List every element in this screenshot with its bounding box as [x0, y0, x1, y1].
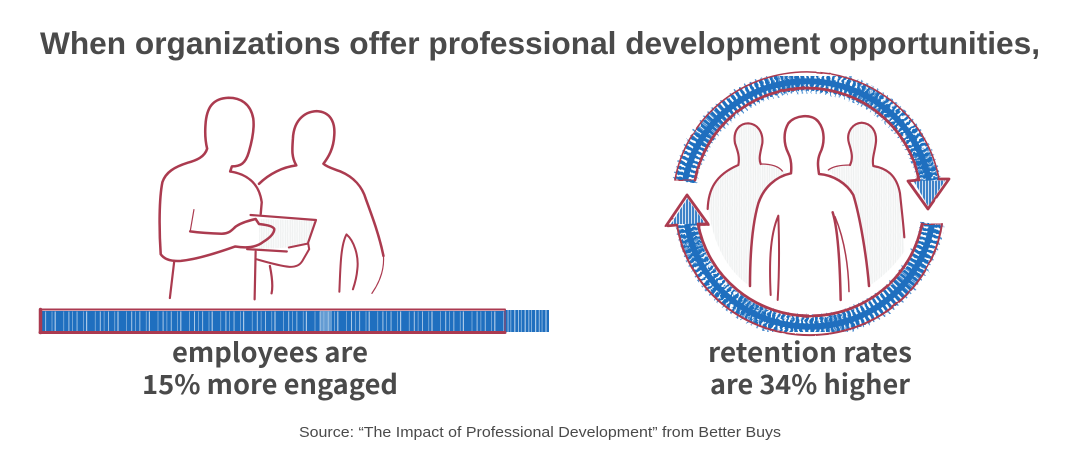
right person shoulder [828, 165, 850, 170]
bar left outline [39, 310, 42, 332]
arrow hatching, lower [671, 198, 932, 327]
centre person [750, 116, 869, 286]
right person outline [848, 123, 904, 237]
bar bottom outline [40, 331, 505, 334]
illustration: two colleagues reviewing a tablet [160, 98, 384, 299]
upper arrowhead hatch [913, 181, 945, 207]
centre person white base [751, 287, 868, 300]
caption line 2: are 34% higher [710, 363, 910, 402]
bar highlights [41, 312, 505, 332]
lower arrow [677, 224, 942, 335]
upper arrow head and inner edge [695, 88, 949, 209]
lower arrow tail [922, 223, 942, 225]
centre person right arm edge [835, 217, 849, 292]
lower arrow head and inner edge [666, 195, 922, 316]
left person shoulder [761, 164, 782, 171]
legs [170, 251, 272, 299]
upper arrow tail [675, 179, 695, 181]
arrow hatching, upper [685, 81, 945, 207]
bar end line [504, 310, 506, 332]
caption line 2: 15% more engaged [142, 363, 398, 402]
tablet screen [259, 219, 315, 249]
caption line 1: employees are [172, 331, 368, 370]
front person chest [230, 171, 262, 214]
bar fill [41, 311, 505, 332]
rear person arm [339, 234, 358, 292]
lower arrowhead hatch [671, 198, 705, 224]
rear person outline [259, 111, 383, 256]
front person sleeve edge [190, 210, 194, 231]
bar top outline [40, 308, 505, 310]
left person outline [708, 123, 762, 209]
centre person right arm [833, 212, 841, 300]
progress bar: 15% more engaged [40, 310, 549, 332]
bar extension stripes [505, 310, 549, 332]
caption line 1: retention rates [708, 331, 912, 370]
centre person left arm [770, 216, 779, 300]
left person shading [708, 123, 787, 286]
lower spikes [687, 224, 932, 327]
caption: retention [708, 331, 912, 402]
rear person back edge [372, 256, 384, 293]
front person outline [160, 98, 274, 261]
upper spikes [685, 81, 929, 181]
source note: Source: “The Impact of Professional Development” from Better Buys [299, 425, 781, 441]
right person shading [828, 123, 904, 286]
upper arrow [675, 72, 939, 180]
supporting hand [256, 243, 309, 267]
caption: employees [142, 331, 398, 402]
upper teeth [685, 81, 929, 181]
lower core [687, 224, 932, 327]
upper core [685, 81, 929, 181]
illustration: three people in a circular arrow [666, 72, 949, 335]
lower teeth [687, 224, 932, 327]
people group [708, 116, 904, 300]
title: When organizations offer professional development opportunities, [40, 25, 1040, 61]
bar pale band [320, 311, 332, 332]
tablet outline [247, 215, 316, 251]
arrow outlines [666, 72, 949, 335]
bar extension base [505, 310, 549, 332]
